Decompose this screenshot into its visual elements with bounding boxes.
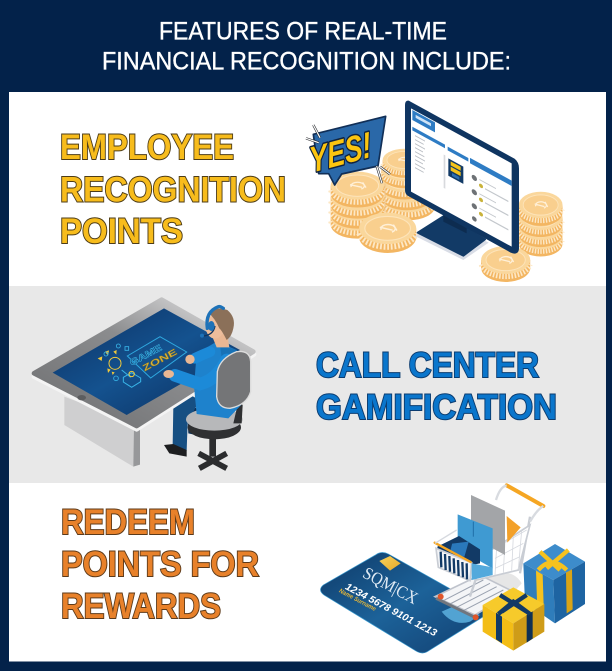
heading: employee recognition points: EMPLOYEE [60,128,234,167]
icon: chair back [217,351,251,408]
icon: bottom coin [481,246,530,282]
illustration: monitor, coins and yes bubble [306,103,563,282]
icon: man torso and arms [163,342,243,418]
panel: employee recognition points [9,92,606,286]
heading: employee recognition points: RECOGNITION [60,170,286,210]
title [102,18,511,76]
heading: call center gamification [316,346,557,427]
card number: 1234 5678 9101 1213 [343,582,439,639]
icon: monitor stand [415,203,489,260]
icon: yes speech bubble [306,116,390,212]
icon: front coin [359,213,416,253]
illustration: man at touch table [34,300,254,468]
card logo: SQM|CX [360,563,421,608]
heading: call center gamification: GAMIFICATION [316,388,557,427]
icon: orange shopping bag [507,516,521,543]
icon: touch table [34,300,254,429]
cart basket [436,548,472,581]
icon: chair seat [186,402,243,439]
icon: man head and headset [200,307,234,347]
icon: credit card [320,552,486,653]
icon: yellow gift box [483,587,544,651]
icon: right coin stack [519,192,563,256]
heading: redeem points for rewards: REDEEM [61,503,195,542]
icon: chair base [199,433,227,468]
heading: redeem points for rewards: POINTS FOR [61,545,259,584]
icon: legs [164,393,207,457]
heading: redeem points for rewards [61,503,259,626]
title: FEATURES OF REAL-TIME [159,18,447,46]
heading: employee recognition points [60,128,286,251]
heading: employee recognition points: POINTS [60,212,183,251]
title: FINANCIAL RECOGNITION INCLUDE: [102,48,511,76]
illustration: credit card, cart and gifts [320,485,585,653]
icon: left coin stack [331,172,384,239]
icon: game zone screen art [98,337,187,387]
icon: gray shopping bag [471,495,505,555]
icon: yes speech bubble: YES! [307,124,373,181]
heading: call center gamification: CALL CENTER [316,346,539,385]
icon: card chip [379,556,401,571]
icon: blue gift box [523,544,585,623]
panel: call center gamification [9,286,606,483]
panel: redeem points for rewards [9,483,606,662]
card name: Name Surname [338,588,377,613]
icon: navy gift in cart [437,536,480,567]
icon: table stand [64,397,140,467]
icon: game zone screen art: ZONE [141,347,179,373]
icon: monitor [407,103,517,251]
icon: shopping cart [435,485,543,623]
icon: game zone screen art: GAME [128,343,164,368]
cart side mesh [472,525,530,580]
heading: redeem points for rewards: REWARDS [61,587,221,626]
icon: blue shopping bag [458,514,493,568]
icon: coin stack behind monitor [380,149,435,220]
